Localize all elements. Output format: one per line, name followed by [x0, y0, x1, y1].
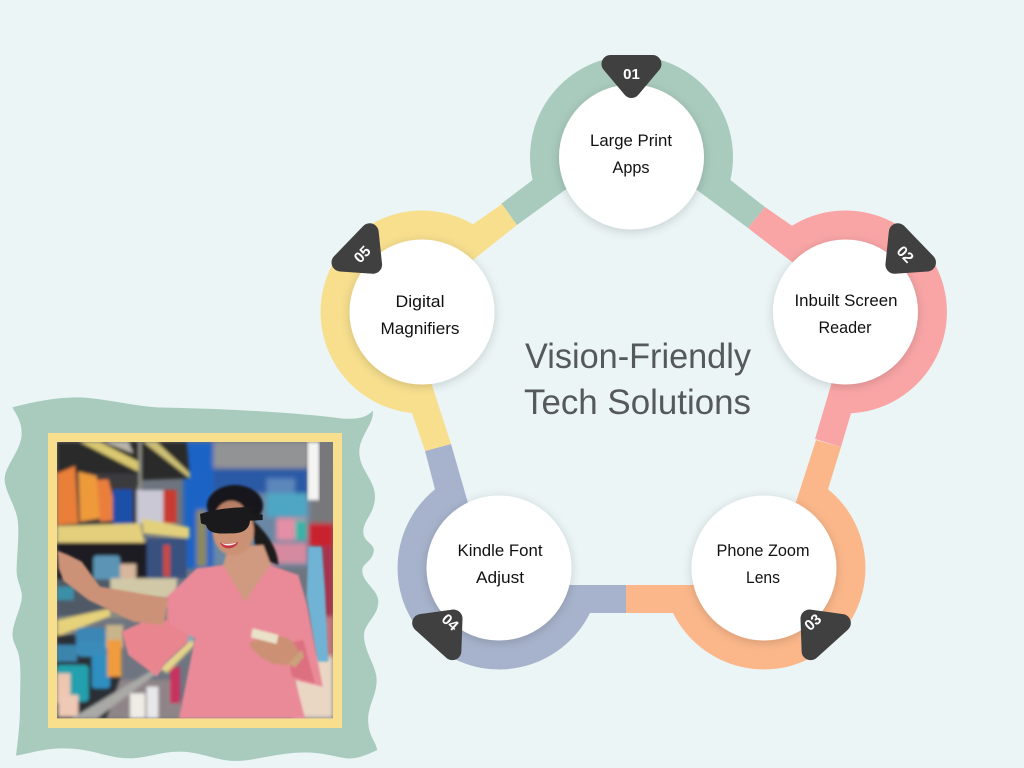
- step 5: Digital Magnifiers: Digital: [396, 292, 444, 311]
- neck and chest: [223, 545, 272, 603]
- dress: [166, 565, 323, 718]
- step 4: Kindle Font Adjust: Kindle Font: [458, 541, 543, 560]
- step 2: Inbuilt Screen Reader: Inbuilt Screen: [794, 291, 898, 310]
- step 4: Kindle Font Adjust: 04: [438, 611, 462, 635]
- step 1: Large Print Apps: 01: [623, 66, 640, 83]
- step 3: Phone Zoom Lens: 03: [801, 611, 825, 635]
- step 5: Digital Magnifiers: Magnifiers: [380, 319, 460, 338]
- face: [211, 520, 256, 555]
- title: Tech Solutions: [524, 383, 751, 422]
- left sleeve: [122, 598, 197, 677]
- panel: five-step ring diagram: [321, 56, 947, 669]
- ring 2 pink: [748, 207, 947, 447]
- step 4: Kindle Font Adjust: Adjust: [476, 568, 524, 587]
- step 5: Digital Magnifiers: 05: [351, 243, 375, 267]
- title: [524, 337, 751, 422]
- yellow photo frame: [48, 433, 342, 728]
- photo: woman wearing vision headset in store aisle: [57, 442, 333, 718]
- watch: [288, 650, 304, 667]
- step 2: Inbuilt Screen Reader: [773, 232, 927, 384]
- smile: [220, 542, 238, 548]
- headset: [200, 507, 263, 534]
- device: [251, 628, 278, 644]
- step 1: Large Print Apps: [559, 64, 704, 230]
- step 5: Digital Magnifiers: [341, 232, 494, 384]
- ring 3 orange: [626, 440, 865, 669]
- step 2: Inbuilt Screen Reader: 02: [893, 243, 917, 267]
- panel: photo with wavy backdrop: [5, 397, 378, 761]
- wavy teal backdrop: [5, 397, 378, 761]
- step 3: Phone Zoom Lens: [692, 496, 842, 651]
- hair: [207, 485, 263, 526]
- ring 5 yellow: [321, 204, 517, 451]
- step 1: Large Print Apps: Apps: [612, 158, 650, 177]
- step 2: Inbuilt Screen Reader: Reader: [818, 318, 872, 337]
- step 3: Phone Zoom Lens: Phone Zoom: [716, 541, 810, 560]
- title: Vision-Friendly: [525, 337, 751, 376]
- step 3: Phone Zoom Lens: Lens: [746, 568, 780, 587]
- ring 4 blue: [398, 444, 626, 669]
- step 4: Kindle Font Adjust: [421, 496, 572, 651]
- ring 1 teal: [501, 56, 765, 228]
- arm and hand: [57, 551, 168, 625]
- step 1: Large Print Apps: Large Print: [590, 131, 672, 150]
- holding hand: [249, 636, 300, 665]
